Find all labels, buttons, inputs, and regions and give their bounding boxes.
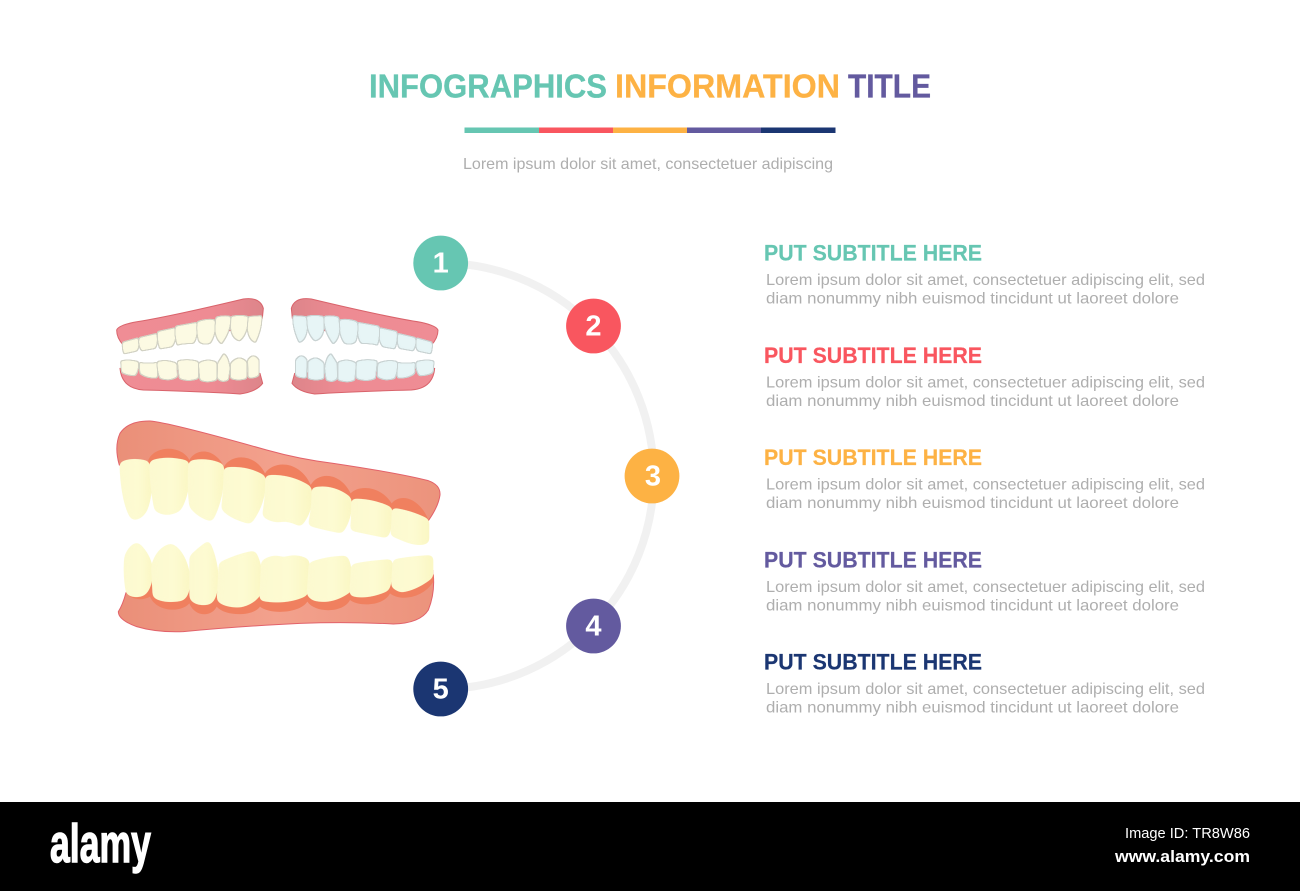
step marker 4: 4 bbox=[585, 610, 602, 642]
gums lower bbox=[292, 368, 435, 394]
step marker 1: 1 bbox=[433, 248, 449, 280]
subtitle: Lorem ipsum dolor sit amet, consectetuer adipiscing bbox=[463, 156, 833, 173]
text block 5 bbox=[764, 650, 1205, 717]
title bbox=[369, 68, 931, 104]
step marker 2 bbox=[566, 299, 621, 353]
teeth bbox=[292, 315, 435, 382]
text block 4: PUT SUBTITLE HERE bbox=[764, 547, 982, 572]
text block 3 bbox=[764, 445, 1205, 512]
upper gum bbox=[117, 421, 440, 521]
text block 1 bbox=[764, 240, 1205, 308]
colour bar under title bbox=[464, 128, 836, 133]
title: INFOGRAPHICS bbox=[369, 68, 607, 104]
step marker 5 bbox=[413, 662, 468, 716]
step marker 5: 5 bbox=[433, 674, 449, 706]
arc connector bbox=[441, 263, 654, 689]
text block 1: PUT SUBTITLE HERE bbox=[764, 240, 982, 266]
text block 2 bbox=[764, 343, 1205, 410]
upper gum band bbox=[148, 449, 428, 525]
lower gum band bbox=[126, 570, 433, 614]
text block 2: Lorem ipsum dolor sit amet, consectetuer adipiscing elit, sed bbox=[766, 374, 1205, 391]
step marker 4 bbox=[566, 599, 621, 653]
small dentures: blue teeth bbox=[291, 299, 438, 394]
text block 2: PUT SUBTITLE HERE bbox=[764, 343, 982, 368]
teeth bbox=[119, 458, 433, 608]
gums lower bbox=[120, 368, 263, 394]
gums upper bbox=[291, 299, 438, 345]
website: www.alamy.com bbox=[1114, 847, 1250, 866]
text block 3: diam nonummy nibh euismod tincidunt ut laoreet dolore bbox=[766, 495, 1179, 512]
step marker 2: 2 bbox=[585, 310, 602, 342]
text block 5: Lorem ipsum dolor sit amet, consectetuer adipiscing elit, sed bbox=[766, 681, 1205, 698]
text block 4 bbox=[764, 547, 1205, 614]
step marker 3 bbox=[625, 449, 679, 503]
text block 4: Lorem ipsum dolor sit amet, consectetuer adipiscing elit, sed bbox=[766, 579, 1205, 596]
gums upper bbox=[117, 299, 263, 345]
teeth bbox=[120, 315, 262, 382]
step marker 3: 3 bbox=[645, 460, 661, 492]
text block 1: Lorem ipsum dolor sit amet, consectetuer adipiscing elit, sed bbox=[766, 272, 1205, 289]
image id: Image ID: TR8W86 bbox=[1125, 825, 1250, 842]
large dentures bbox=[117, 421, 440, 632]
footer bar bbox=[0, 802, 1300, 891]
text block 4: diam nonummy nibh euismod tincidunt ut laoreet dolore bbox=[766, 597, 1179, 614]
text block 3: Lorem ipsum dolor sit amet, consectetuer adipiscing elit, sed bbox=[766, 477, 1205, 494]
text block 2: diam nonummy nibh euismod tincidunt ut laoreet dolore bbox=[766, 393, 1179, 410]
title: TITLE bbox=[848, 68, 931, 104]
small dentures: yellow teeth bbox=[117, 299, 263, 394]
text block 1: diam nonummy nibh euismod tincidunt ut laoreet dolore bbox=[766, 290, 1179, 308]
lower gum bbox=[118, 575, 434, 632]
title: INFORMATION bbox=[615, 68, 840, 104]
step marker 1 bbox=[413, 236, 468, 290]
text block 5: PUT SUBTITLE HERE bbox=[764, 650, 982, 675]
alamy logo: alamy bbox=[50, 814, 151, 874]
text block 5: diam nonummy nibh euismod tincidunt ut laoreet dolore bbox=[766, 700, 1179, 717]
text block 3: PUT SUBTITLE HERE bbox=[764, 445, 982, 470]
